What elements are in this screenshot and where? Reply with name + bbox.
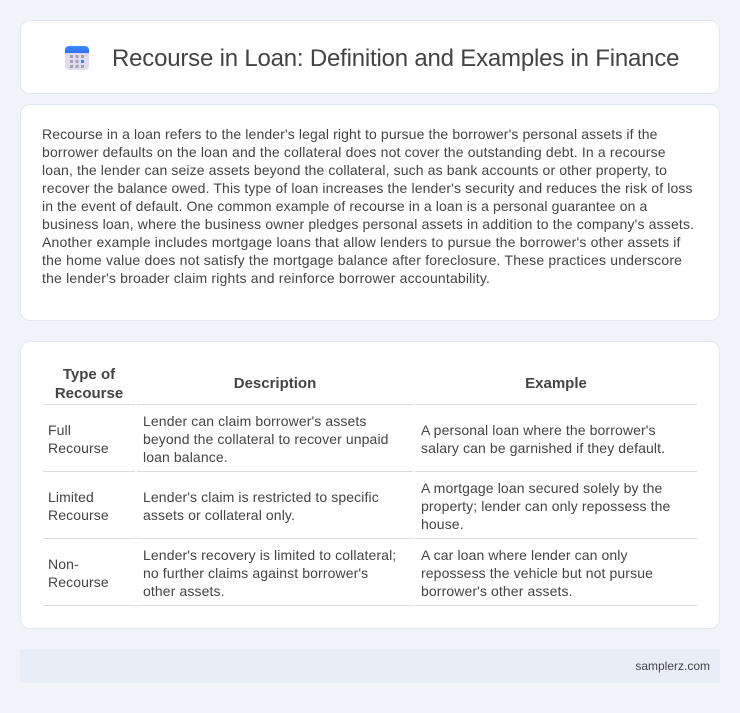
row 3 description: Lender's recovery is limited to collateral; xyxy=(143,547,396,563)
row 2 example: house. xyxy=(421,516,464,532)
definition text: the lender's broader claim rights and reinforce borrower accountability. xyxy=(42,270,490,286)
table header: type of recourse: Type of xyxy=(63,366,115,383)
row 2 type xyxy=(48,489,109,523)
row 3 example xyxy=(421,547,653,599)
row 2 example xyxy=(421,480,670,532)
row 3 type xyxy=(48,556,109,590)
definition text: borrower defaults on the loan and the collateral does not cover the outstanding debt. In a recourse xyxy=(42,144,666,160)
row 1 type: Full xyxy=(48,422,71,438)
row 1 type xyxy=(48,422,109,456)
definition text: in the event of default. One common example of recourse in a loan is a personal guarantee on a xyxy=(42,198,647,214)
row 3 example: A car loan where lender can only xyxy=(421,547,628,563)
definition text: Another example includes mortgage loans that allow lenders to pursue the borrower's other assets if xyxy=(42,234,681,250)
row 1 example: salary can be garnished if they default. xyxy=(421,440,665,456)
row 3 type: Recourse xyxy=(48,574,109,590)
definition text: loan, the lender can seize assets beyond the collateral, such as bank accounts or other property, to xyxy=(42,162,667,178)
row 2 type: Limited xyxy=(48,489,94,505)
row 2 example: A mortgage loan secured solely by the xyxy=(421,480,662,496)
row 1 description: Lender can claim borrower's assets xyxy=(143,413,367,429)
row 3 description: no further claims against borrower's xyxy=(143,565,368,581)
table header: type of recourse: Recourse xyxy=(55,385,123,402)
footer text: samplerz.com xyxy=(635,659,710,673)
row 2 type: Recourse xyxy=(48,507,109,523)
row 2 example: property; lender can only repossess the xyxy=(421,498,670,514)
definition text xyxy=(42,126,694,286)
row 1 description: loan balance. xyxy=(143,449,228,465)
footer bar xyxy=(20,649,720,683)
table header: type of recourse xyxy=(55,366,123,402)
row 3 example: borrower's other assets. xyxy=(421,583,573,599)
table header: description: Description xyxy=(234,375,316,392)
row 3 type: Non- xyxy=(48,556,79,572)
row 2 description xyxy=(143,489,379,523)
row 2 description: Lender's claim is restricted to specific xyxy=(143,489,379,505)
panel: definition paragraph xyxy=(20,104,720,321)
header panel xyxy=(20,20,720,94)
row 2 description: assets or collateral only. xyxy=(143,507,295,523)
definition text: the home value does not satisfy the mortgage balance after foreclosure. These practices underscore xyxy=(42,252,682,268)
panel: recourse table xyxy=(20,341,720,629)
row 3 example: repossess the vehicle but not pursue xyxy=(421,565,653,581)
definition text: recover the balance owed. This type of loan increases the lender's security and reduces the risk of loss xyxy=(42,180,693,196)
row 3 description: other assets. xyxy=(143,583,225,599)
table header: example: Example xyxy=(525,375,587,392)
row 3 description xyxy=(143,547,396,599)
row 1 example xyxy=(421,422,665,456)
row 1 example: A personal loan where the borrower's xyxy=(421,422,656,438)
row 1 description: beyond the collateral to recover unpaid xyxy=(143,431,389,447)
row 1 type: Recourse xyxy=(48,440,109,456)
row 1 description xyxy=(143,413,389,465)
definition text: business loan, where the business owner pledges personal assets in addition to the company's assets. xyxy=(42,216,694,232)
definition text: Recourse in a loan refers to the lender's legal right to pursue the borrower's personal assets if the xyxy=(42,126,658,142)
title: Recourse in Loan: Definition and Examples in Finance xyxy=(112,45,679,72)
icon: calendar xyxy=(65,46,89,70)
